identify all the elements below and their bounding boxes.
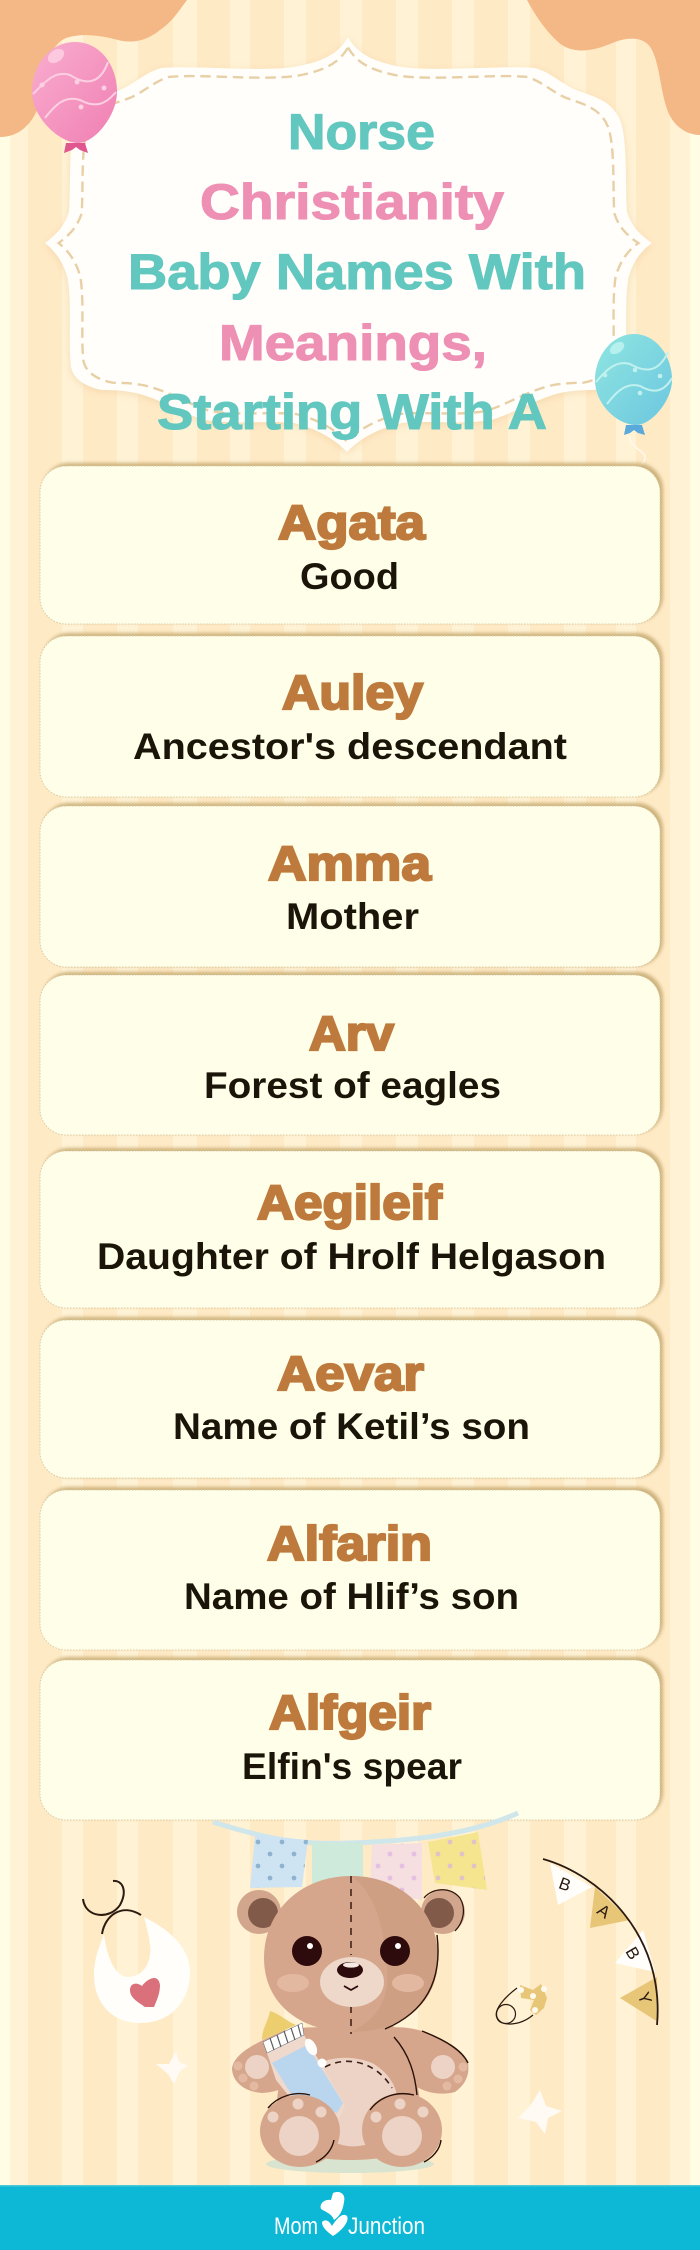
card: Amma: Amma: [268, 838, 431, 891]
right foot: [362, 2093, 442, 2167]
ears: [237, 1890, 465, 1934]
head: [264, 1876, 438, 2032]
left foot: [260, 2094, 340, 2167]
footer brand text: Mom: [274, 2213, 318, 2240]
nose and mouth: [337, 1962, 363, 1990]
title: [128, 104, 586, 440]
card: Amma: Mother: [286, 896, 419, 937]
icon: BABY pennant banner: A: [594, 1900, 614, 1923]
body: [276, 2025, 420, 2160]
muzzle: [320, 1957, 384, 2007]
card: Aegileif: Aegileif: [257, 1177, 443, 1230]
icon: safety pin: [496, 1984, 547, 2024]
title: Christianity: [200, 174, 504, 230]
icon: BABY pennant banner: Y: [634, 1990, 655, 2007]
card: Alfgeir: Elfin's spear: [242, 1746, 462, 1787]
card: Aevar: Aevar: [277, 1348, 424, 1401]
title: Starting With A: [157, 384, 547, 440]
curtain: top left: [0, 0, 187, 137]
card: Alfarin: Name of Hlif’s son: [184, 1576, 519, 1617]
cheeks: [277, 1974, 309, 1992]
card: Aegileif: [40, 1148, 663, 1308]
teddy bear: [232, 1876, 468, 2173]
card: Alfgeir: Alfgeir: [269, 1687, 431, 1740]
eyes: [292, 1936, 410, 1966]
title: Baby Names With: [128, 244, 586, 300]
footer band: [0, 2185, 700, 2250]
card: Agata: Agata: [278, 497, 425, 550]
icon: bib: [83, 1881, 190, 2023]
card: Alfarin: Alfarin: [267, 1518, 432, 1571]
card: Auley: [40, 633, 663, 797]
head seam: [350, 1876, 352, 2034]
belly patch: [320, 2058, 398, 2146]
plaque: title frame: [45, 37, 652, 454]
card: Agata: [40, 463, 663, 624]
card: Alfgeir: [40, 1657, 663, 1820]
icon: blue balloon: [595, 334, 672, 468]
bunting garland: [213, 1813, 518, 1900]
baby bottle: [262, 2011, 345, 2118]
card: Auley: Auley: [282, 667, 423, 720]
icon: star left: [156, 2051, 188, 2084]
card: Arv: [40, 972, 663, 1135]
card: Aevar: Name of Ketil’s son: [173, 1406, 530, 1447]
title: Meanings,: [219, 315, 487, 371]
card: Auley: Ancestor's descendant: [133, 726, 567, 767]
arms: [232, 2027, 468, 2094]
card: Alfarin: [40, 1487, 663, 1650]
icon: pink balloon: [32, 42, 117, 153]
footer logo: [321, 2192, 348, 2236]
icon: BABY pennant banner: B: [622, 1944, 644, 1963]
card: Arv: Arv: [309, 1008, 394, 1061]
card: Agata: Good: [300, 556, 399, 597]
card: Arv: Forest of eagles: [204, 1065, 501, 1106]
head right shading: [351, 1876, 438, 2032]
icon: star right: [518, 2090, 562, 2134]
footer band: Junction: [348, 2213, 425, 2240]
curtain: top right: [527, 0, 700, 135]
card: Aegileif: Daughter of Hrolf Helgason: [97, 1236, 606, 1277]
card: Amma: [40, 803, 663, 967]
card: Aevar: [40, 1317, 663, 1478]
icon: BABY pennant banner: [543, 1859, 658, 2025]
icon: BABY pennant banner: B: [556, 1874, 573, 1895]
shadow under bear: [266, 2155, 434, 2173]
title: Norse: [288, 104, 435, 160]
